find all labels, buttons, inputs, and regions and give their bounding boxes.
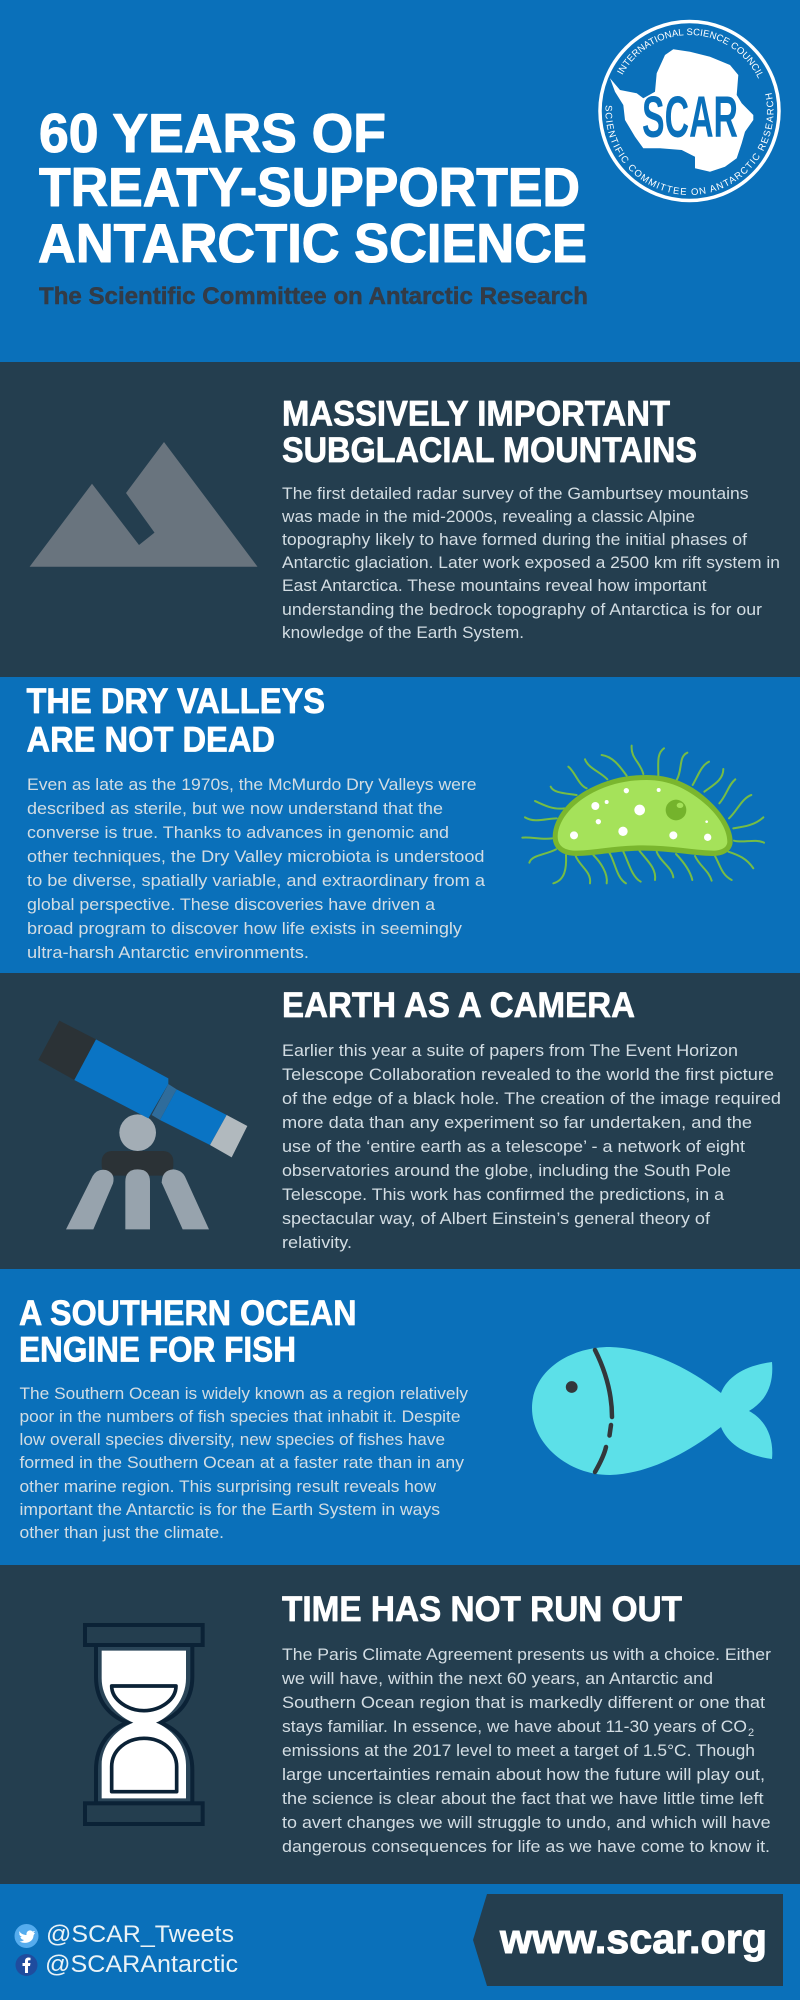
text block: dry valleys [27, 776, 486, 962]
text block: time has not run out: to avert changes we will struggle to undo, and which will have [282, 1814, 771, 1832]
text block: subglacial mountains: The first detailed radar survey of the Gamburtsey mountains [282, 485, 748, 503]
text block: subglacial mountains: was made in the mid-2000s, revealing a classic Alpine [281, 508, 695, 526]
text block: subglacial mountains: understanding the bedrock topography of Antarctica is for our [282, 601, 763, 619]
text block: time has not run out [281, 1646, 772, 1856]
heading: southern ocean: ENGINE FOR FISH [19, 1330, 296, 1370]
text block: southern ocean: The Southern Ocean is widely known as a region relatively [20, 1385, 469, 1403]
title: 60 YEARS OF [39, 102, 386, 164]
icon: hourglass [85, 1625, 203, 1824]
callout: website [473, 1894, 783, 1986]
panel: subglacial mountains [0, 362, 800, 677]
text block: time has not run out: we will have, within the next 60 years, an Antarctic and [281, 1670, 713, 1688]
heading: southern ocean: A SOUTHERN OCEAN [19, 1294, 356, 1333]
text block: southern ocean [20, 1385, 469, 1542]
text block: time has not run out: stays familiar. In essence, we have about 11-30 years of CO [282, 1718, 747, 1736]
icon: facebook [16, 1954, 38, 1976]
text block: time has not run out: The Paris Climate Agreement presents us with a choice. Either [282, 1646, 772, 1664]
text block: earth as a camera: Telescope. This work has confirmed the predictions, in a [282, 1186, 725, 1204]
panel: footer [0, 1884, 800, 2000]
text block: earth as a camera: relativity. [282, 1234, 352, 1252]
icon: fish [532, 1347, 772, 1475]
text block: subglacial mountains: East Antarctica. These mountains reveal how important [282, 577, 707, 595]
heading: dry valleys [26, 682, 325, 760]
heading: time has not run out: TIME HAS NOT RUN OUT [282, 1590, 682, 1629]
icon: telescope [38, 1021, 247, 1229]
heading: earth as a camera: EARTH AS A CAMERA [282, 986, 635, 1025]
icon: SCAR logo: INTERNATIONAL SCIENCE COUNCIL [617, 28, 763, 78]
text block: time has not run out: emissions at the 2017 level to meet a target of 1.5°C. Though [282, 1742, 755, 1760]
text block: earth as a camera: Earlier this year a suite of papers from The Event Horizon [282, 1042, 738, 1060]
text block: southern ocean: important the Antarctic is for the Earth System in ways [20, 1501, 440, 1519]
text block: southern ocean: other marine region. This surprising result reveals how [20, 1478, 436, 1496]
text block: earth as a camera: of the edge of a black hole. The creation of the image required [282, 1090, 781, 1108]
text block: time has not run out: dangerous consequences for life as we have come to know it. [282, 1838, 770, 1856]
panel: dry valleys [0, 677, 800, 973]
text block: dry valleys: converse is true. Thanks to advances in genomic and [27, 824, 449, 842]
panel: earth as a camera [0, 973, 800, 1269]
text block: time has not run out: large uncertainties remain about how the future will play out, [282, 1766, 765, 1784]
text block: earth as a camera: Telescope Collaboration revealed to the world the first picture [282, 1066, 774, 1084]
text block: dry valleys: global perspective. These discoveries have driven a [27, 896, 436, 914]
text block: earth as a camera: spectacular way, of Albert Einstein’s general theory of [282, 1210, 710, 1228]
icon: mountains [30, 442, 257, 567]
text block: dry valleys: to be diverse, spatially variable, and extraordinary from a [27, 872, 486, 890]
heading: dry valleys: ARE NOT DEAD [26, 720, 275, 760]
icon: SCAR logo [598, 20, 781, 202]
text block: southern ocean: low overall species diversity, new species of fishes have [20, 1431, 445, 1449]
text block: southern ocean: other than just the climate. [20, 1524, 224, 1542]
text block: earth as a camera: observatories around the globe, including the South Pole [282, 1162, 731, 1180]
heading: dry valleys: THE DRY VALLEYS [26, 682, 325, 721]
icon: twitter [14, 1924, 38, 1948]
text block: time has not run out: the science is clear about the fact that we have little time left [282, 1790, 764, 1808]
heading: southern ocean [19, 1294, 356, 1370]
text block: dry valleys: broad program to discover how life exists in seemingly [27, 920, 463, 938]
callout: website: www.scar.org [499, 1915, 767, 1962]
text block: earth as a camera: use of the ‘entire earth as a telescope’ - a network of eight [282, 1138, 745, 1156]
title: TREATY-SUPPORTED [39, 156, 580, 218]
panel: header [38, 20, 781, 310]
text block: subglacial mountains [281, 485, 780, 642]
title: ANTARCTIC SCIENCE [38, 212, 587, 274]
panel: southern ocean [0, 1269, 800, 1565]
text block: dry valleys: ultra-harsh Antarctic environments. [27, 944, 309, 962]
text block: earth as a camera [282, 1042, 781, 1252]
heading: subglacial mountains: SUBGLACIAL MOUNTAINS [282, 431, 697, 470]
text block: subglacial mountains: Antarctic glaciation. Later work exposed a 2500 km rift system in [282, 554, 780, 572]
text block: southern ocean: poor in the numbers of fish species that inhabit it. Despite [20, 1408, 460, 1426]
text block: dry valleys: Even as late as the 1970s, the McMurdo Dry Valleys were [27, 776, 476, 794]
text block: dry valleys: other techniques, the Dry Valley microbiota is understood [27, 848, 484, 866]
text block: time has not run out: Southern Ocean region that is markedly different or one that [282, 1694, 765, 1712]
title [38, 102, 587, 274]
text block: time has not run out: 2 [748, 1727, 754, 1739]
heading: subglacial mountains [282, 394, 697, 470]
text block: subglacial mountains: knowledge of the Earth System. [282, 624, 524, 642]
icon: SCAR logo: SCIENTIFIC COMMITTEE ON ANTARCTIC RESEARCH [605, 93, 774, 195]
subtitle: The Scientific Committee on Antarctic Research [39, 283, 588, 310]
text block: southern ocean: formed in the Southern Ocean at a faster rate than in any [20, 1454, 465, 1472]
icon: green microbe [522, 746, 764, 883]
text block: earth as a camera: more data than any experiment so far undertaken, and the [282, 1114, 752, 1132]
heading: subglacial mountains: MASSIVELY IMPORTANT [282, 394, 670, 434]
panel: time has not run out [0, 1565, 800, 1884]
text block: dry valleys: described as sterile, but we now understand that the [27, 800, 443, 818]
social handle: twitter: @SCAR_Tweets [46, 1921, 234, 1948]
text block: subglacial mountains: topography likely to have formed during the initial phases of [282, 531, 747, 549]
social handle: facebook: @SCARAntarctic [45, 1951, 238, 1978]
